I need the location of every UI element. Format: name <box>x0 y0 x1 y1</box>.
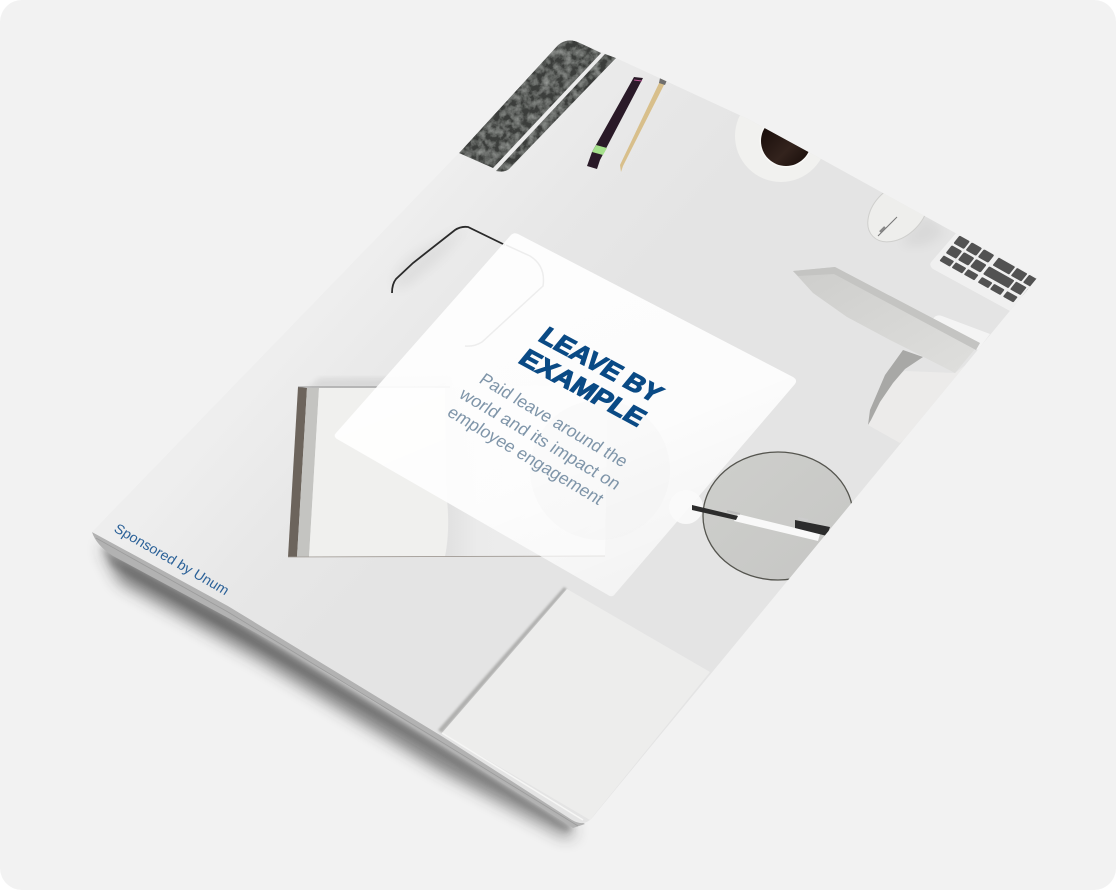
booklet page stack edge <box>92 532 585 828</box>
subtitle <box>444 369 632 509</box>
booklet cover photo <box>80 30 1050 840</box>
open notebook <box>288 384 608 557</box>
clip right jaw <box>795 520 830 536</box>
pen <box>587 77 643 169</box>
faint glasses seen through panel <box>465 245 543 346</box>
keyboard <box>930 234 1036 310</box>
glasses shadow <box>398 241 448 284</box>
faint plate seen through panel <box>530 400 670 540</box>
clip bar <box>734 514 820 541</box>
dark stone notebook <box>459 40 616 172</box>
white ball <box>677 496 703 524</box>
round plate <box>703 452 853 580</box>
translucent white title panel <box>335 233 796 596</box>
title: LEAVE BY <box>533 323 668 408</box>
desk surface <box>80 30 1050 840</box>
blank paper sheet <box>438 587 710 820</box>
mouse <box>867 193 936 242</box>
reading glasses arm <box>392 227 505 293</box>
pencil <box>620 78 667 172</box>
notebook shadow <box>310 378 384 388</box>
clip left jaw <box>692 505 738 520</box>
coffee cup and saucer <box>735 116 820 182</box>
sponsor line: Sponsored by Unum <box>111 520 232 598</box>
subtitle: world and its impact on <box>455 384 625 494</box>
booklet cast shadow <box>100 545 575 838</box>
monitor <box>793 267 990 425</box>
white ball and binder clip <box>677 496 830 541</box>
subtitle: employee engagement <box>444 402 608 509</box>
title: EXAMPLE <box>513 345 651 432</box>
subtitle: Paid leave around the <box>476 369 632 471</box>
title <box>513 323 668 432</box>
